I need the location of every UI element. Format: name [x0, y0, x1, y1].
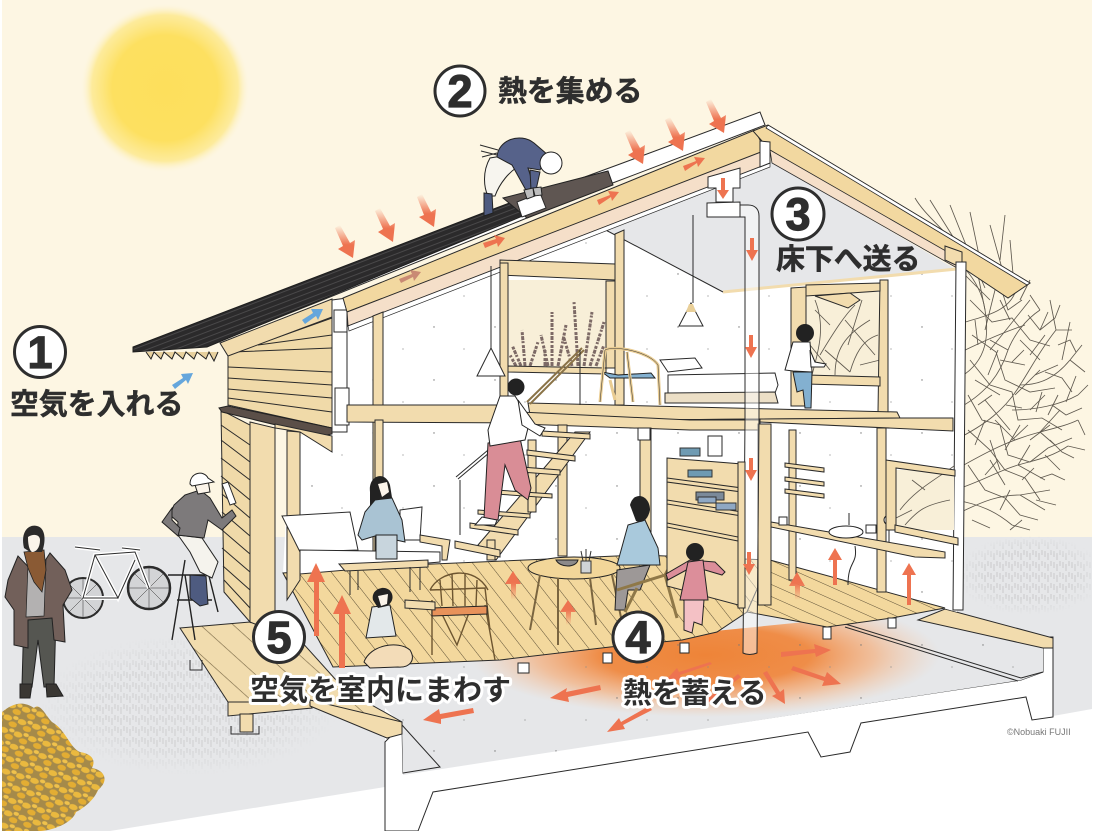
shelf vertical [738, 462, 745, 608]
siding lower boards [221, 425, 250, 608]
man shirt [488, 396, 530, 446]
right upper window [791, 280, 888, 412]
person: woman's bicycle [63, 547, 170, 618]
rear wheel [63, 578, 103, 618]
heat storage glow [482, 620, 930, 714]
gable ceiling slope line [600, 227, 723, 292]
lower posts [375, 420, 886, 605]
duct connector [708, 168, 740, 202]
upper chair [600, 348, 660, 405]
child arms [666, 560, 725, 580]
window glass [508, 280, 608, 370]
worker top [170, 490, 236, 538]
low window view [896, 470, 954, 530]
rafter band wood [343, 130, 766, 312]
rafter band pink [347, 150, 770, 326]
person: seated child [366, 588, 396, 638]
sofa [282, 507, 450, 574]
rafter white lower strip [348, 163, 770, 331]
label 1: 空気を入れる [10, 389, 183, 421]
label 2: 熱を集める [498, 76, 642, 108]
siding upper [228, 318, 332, 428]
wall shelves [785, 463, 824, 498]
wall box lower [335, 388, 349, 425]
table top [528, 557, 620, 579]
airflow arrows in roof channel [399, 157, 705, 283]
frame [75, 547, 149, 598]
sofa arm [420, 535, 450, 560]
staircase [455, 348, 590, 560]
step 3: send under floor: 3 [785, 189, 811, 240]
handrail upper [527, 348, 584, 404]
window left post [500, 263, 508, 403]
step 2: collect heat [435, 66, 642, 117]
basin [829, 526, 863, 538]
copyright: ©Nobuaki FUJII [1007, 727, 1071, 737]
person: child on loft [785, 324, 826, 408]
woman head [23, 526, 45, 552]
mirror [888, 520, 890, 542]
deck fascia [228, 702, 312, 716]
step 1: intake air: 1 [27, 327, 53, 378]
roofer tools [480, 145, 498, 157]
faucet [848, 513, 856, 585]
right post top [945, 246, 962, 268]
roofer arm [530, 170, 540, 190]
step 4: store heat [613, 612, 767, 710]
step 5: circulate air [250, 612, 511, 707]
number 5 [254, 612, 304, 662]
cup with utensils [581, 549, 591, 573]
label 5: 空気を室内にまわす [250, 674, 511, 707]
person: roof worker [480, 138, 562, 216]
person: woman on sofa [358, 476, 405, 559]
roof shingles [133, 199, 525, 352]
bed headboard pillow [660, 358, 702, 372]
number 1 [14, 326, 66, 378]
man feet [475, 517, 497, 525]
roofer boot [484, 193, 493, 216]
stair treads [455, 431, 590, 557]
floor right [747, 560, 945, 627]
stair posts [487, 440, 536, 560]
step 3: send under floor [772, 188, 920, 276]
mattress [668, 373, 778, 395]
worker boots [190, 575, 208, 606]
low window sill [895, 525, 958, 545]
woman face [28, 535, 40, 552]
window head [806, 283, 880, 296]
sun [80, 3, 250, 173]
grass texture left [60, 644, 320, 766]
sofa back [282, 512, 358, 552]
child hair [373, 588, 393, 608]
attic gray gable [600, 162, 957, 292]
wall box upper [334, 310, 347, 332]
loft beam [630, 418, 953, 431]
step 2: collect heat: 2 [447, 66, 473, 117]
step 1: intake air [10, 326, 183, 421]
worker arm down [162, 508, 180, 536]
chair cushion [432, 606, 487, 616]
rising air arrows [307, 548, 916, 668]
arrows spreading through slab [423, 644, 841, 732]
gable white edge [766, 125, 1030, 285]
child legs [793, 372, 812, 408]
entry top panel [275, 424, 332, 452]
shelf items lower [698, 497, 736, 510]
woman legs [22, 615, 56, 687]
front post [332, 298, 347, 432]
loft ceiling edge [723, 269, 957, 292]
wood stem plate [310, 700, 402, 738]
child face [378, 594, 388, 606]
shelf items middle [696, 492, 724, 500]
man shirt [617, 520, 660, 565]
window sill [806, 375, 880, 386]
child shirt [785, 342, 812, 372]
downflow arrows in duct [717, 178, 758, 575]
dog [364, 645, 412, 668]
roofer pants [484, 155, 516, 196]
number 4 [613, 612, 663, 662]
woman blouse [358, 498, 405, 542]
ridge post [760, 141, 770, 167]
gray shingle stack [503, 171, 613, 218]
solar heat arrows on roof [335, 99, 726, 258]
pendant lamp right [679, 215, 703, 326]
person: man on stairs [475, 378, 545, 525]
man pants [484, 438, 531, 520]
front wheel [128, 567, 170, 609]
window right post [615, 230, 624, 405]
roof assembly [133, 112, 1030, 361]
window inner frame [606, 281, 615, 368]
wooden armchair [430, 573, 495, 660]
woman scarf [24, 550, 46, 592]
shelves [667, 478, 742, 541]
woman coat [5, 553, 72, 648]
step 5: circulate air: 5 [266, 612, 292, 663]
interior wall [283, 163, 957, 612]
washbasin counter [771, 513, 945, 585]
child shirt [680, 560, 708, 600]
worker cap [190, 473, 214, 486]
roofer helmet [540, 152, 562, 174]
bowl [556, 560, 578, 566]
concrete slab [345, 608, 1043, 775]
child body [366, 605, 396, 638]
inner wood bracket [815, 293, 860, 308]
roofer torso [497, 138, 548, 192]
left upper window with plants [500, 230, 624, 405]
shelf back [667, 458, 742, 606]
handrail post [579, 350, 581, 405]
small items [779, 517, 876, 533]
counter top [771, 522, 945, 558]
living table [339, 560, 428, 595]
window view [806, 292, 881, 377]
roof white sheathing [207, 112, 765, 346]
eave teeth [146, 352, 218, 361]
window head beam [500, 260, 615, 280]
siding upper boards [228, 335, 332, 412]
foundation [385, 637, 1053, 831]
woman skirt [376, 535, 397, 559]
right wall post [953, 262, 966, 610]
bed base [665, 392, 778, 403]
worker legs [178, 535, 218, 578]
woman sweater [26, 560, 46, 617]
duct pipe [740, 205, 759, 654]
shelf unit [667, 436, 745, 608]
dining table [528, 549, 622, 645]
air duct [707, 168, 759, 654]
spokes [63, 567, 170, 618]
man trousers [615, 565, 650, 610]
dining chair [617, 555, 677, 618]
gable pink strip [770, 150, 958, 268]
child head [796, 324, 814, 342]
ladder [168, 560, 218, 640]
shelf jar [708, 436, 722, 456]
stair stringer [478, 432, 590, 560]
eave board [219, 406, 332, 436]
duct fan box [707, 202, 740, 217]
person: woman standing [5, 526, 72, 698]
child arm [810, 350, 826, 367]
roofer hands [524, 187, 542, 199]
window sill [508, 366, 606, 374]
window branches [810, 300, 880, 375]
low window frame [886, 460, 955, 530]
shelf items upper [680, 448, 712, 477]
person: seated man at dining table [615, 496, 677, 618]
woman hair [370, 476, 394, 514]
pendant lamp left [477, 266, 505, 376]
entry frame posts [250, 422, 300, 632]
gable right wood [753, 125, 1030, 298]
step 4: store heat: 4 [625, 612, 651, 663]
siding lower [221, 410, 250, 622]
low window branches [896, 466, 954, 525]
right sill [918, 609, 1053, 648]
man head [508, 378, 524, 396]
deck [180, 622, 402, 738]
number 3 [772, 188, 824, 240]
table legs [530, 575, 622, 645]
upper loft bed [660, 358, 778, 403]
slab speckle [345, 608, 1043, 775]
worker face [194, 480, 210, 494]
loft floor [528, 403, 900, 420]
wall specks [283, 163, 957, 612]
deck post [190, 660, 259, 734]
window posts [791, 287, 806, 406]
woman boots [20, 684, 63, 698]
man arms [518, 400, 545, 436]
label 4: 熱を蓄える [623, 678, 767, 710]
woman face [378, 482, 389, 497]
floor beam left [347, 405, 520, 423]
loft beam left [520, 412, 760, 430]
worker brush [222, 482, 236, 505]
plants [510, 302, 604, 366]
left wall post [373, 312, 383, 560]
background: ground [2, 537, 1092, 831]
child leggings [684, 600, 704, 633]
foundation inner lines [402, 623, 1043, 773]
floor left [283, 555, 770, 667]
bush [2, 704, 105, 831]
number 2 [435, 66, 485, 116]
sofa seat [300, 550, 440, 574]
background: sky [2, 0, 1092, 538]
grass texture right [964, 540, 1090, 610]
overhang soffit [220, 299, 332, 356]
child head [686, 543, 704, 561]
right low window [886, 460, 958, 545]
man head [630, 496, 650, 522]
handrail lower [456, 440, 502, 535]
floor joist blocks [518, 618, 896, 673]
person: child in pink [666, 543, 725, 633]
tree [915, 198, 1088, 530]
white roofing sheet [517, 193, 546, 217]
white wall boxes [638, 428, 650, 440]
label 3: 床下へ送る [776, 244, 920, 276]
small step stool [405, 600, 435, 610]
blue intake arrows [172, 309, 323, 389]
person: worker on ladder [162, 473, 236, 640]
